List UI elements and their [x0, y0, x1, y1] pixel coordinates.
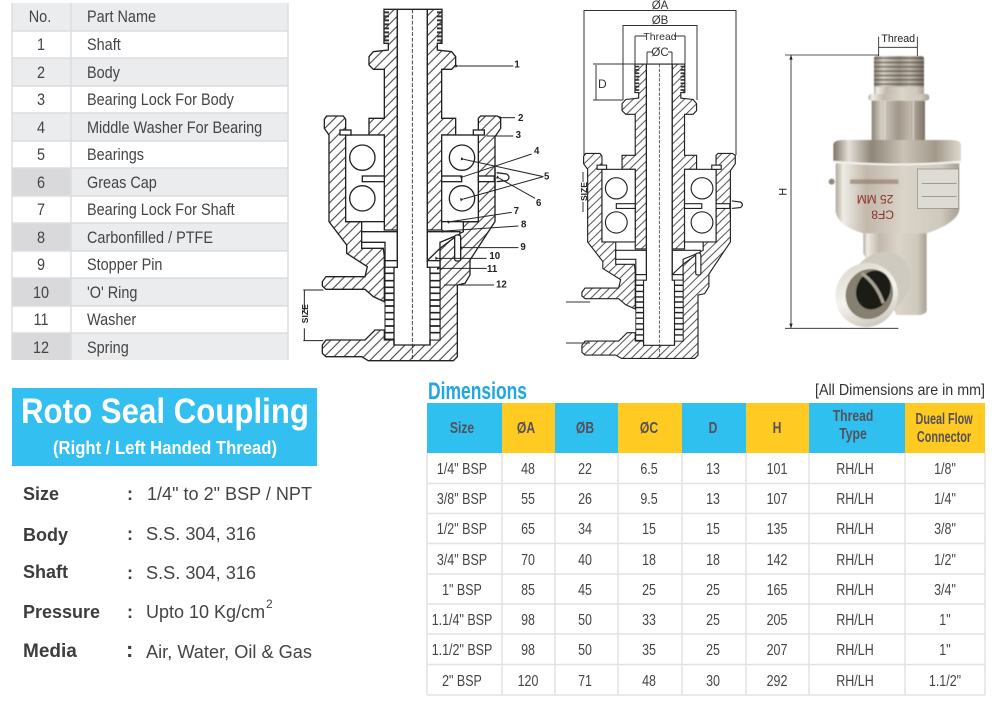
dimensions table: Size	[450, 419, 474, 438]
dimensions table: 25	[706, 642, 720, 659]
parts table: Shaft	[87, 36, 121, 54]
specifications list: Body	[23, 525, 68, 545]
dimensions table: 207	[767, 642, 787, 659]
dimensions table: 18	[706, 552, 720, 569]
dimensions table: 135	[767, 521, 787, 538]
dimensions table: 3/4"	[934, 582, 956, 599]
parts table: Bearing Lock For Body	[87, 91, 234, 109]
product photo of coupling: H	[777, 188, 789, 196]
dimensions table: 18	[642, 552, 656, 569]
dimensions table: 1/2" BSP	[437, 521, 487, 538]
dimensions table: 120	[518, 673, 538, 690]
parts table: Washer	[87, 311, 136, 329]
dimensions table: 35	[642, 642, 656, 659]
dimensions table: 1.1/2"	[929, 673, 961, 690]
dimensions table: RH/LH	[836, 521, 874, 538]
dimensions table: 1/4" BSP	[437, 461, 487, 478]
dimensioned cross-section diagram: ØA	[652, 0, 669, 12]
dimensions table: 6.5	[640, 461, 658, 478]
cross-section diagram with part numbers: 12	[496, 280, 507, 291]
dimensions table: H	[773, 419, 781, 438]
parts table: No.	[29, 8, 51, 26]
dimensions table: 1/4"	[934, 491, 956, 508]
dimensions table: RH/LH	[836, 491, 874, 508]
cross-section diagram with part numbers: 2	[518, 113, 523, 124]
cross-section diagram with part numbers: 9	[520, 242, 526, 253]
product photo of coupling: CF8	[871, 208, 894, 222]
cross-section diagram with part numbers: 10	[489, 251, 500, 262]
dimensions table: ØA	[517, 419, 535, 438]
dimensions table: 101	[767, 461, 787, 478]
parts table: Stopper Pin	[87, 256, 162, 274]
title banner	[12, 388, 317, 466]
dimensions table: 34	[578, 521, 592, 538]
cross-section diagram with part numbers: 11	[487, 264, 498, 275]
specifications list: Air, Water, Oil & Gas	[146, 642, 312, 662]
dimensions table: 13	[706, 491, 720, 508]
dimensions table: 30	[706, 673, 720, 690]
cross-section diagram with part numbers: 8	[521, 219, 527, 230]
dimensions table: 1"	[939, 612, 951, 629]
parts table: 1	[37, 36, 45, 54]
specifications list: :	[127, 524, 133, 544]
parts table: 11	[34, 311, 48, 329]
specifications list: Pressure	[23, 602, 100, 622]
product photo of coupling: Thread	[881, 33, 915, 45]
specifications list	[23, 484, 312, 662]
dimensions heading: [All Dimensions are in mm]	[815, 382, 985, 399]
specifications list: :	[127, 484, 133, 504]
title banner: (Right / Left Handed Thread)	[53, 438, 277, 458]
dimensions table: 1"	[939, 642, 951, 659]
dimensions table: 142	[767, 552, 787, 569]
dimensions table: 107	[767, 491, 787, 508]
dimensions table: 1.1/2" BSP	[432, 642, 492, 659]
specifications list: Media	[23, 641, 77, 662]
dimensions table: Connector	[917, 428, 971, 445]
dimensions table: RH/LH	[836, 582, 874, 599]
parts table: 'O' Ring	[87, 284, 137, 302]
cross-section diagram with part numbers: 5	[544, 171, 550, 182]
parts table: 8	[37, 229, 45, 247]
cross-section diagram with part numbers	[300, 9, 550, 361]
dimensions table: 25	[706, 582, 720, 599]
specifications list: S.S. 304, 316	[146, 524, 256, 544]
parts table: 7	[37, 201, 45, 219]
dimensioned cross-section diagram: ØC	[651, 47, 669, 59]
dimensions table: 292	[767, 673, 787, 690]
specifications list: 2	[266, 597, 273, 611]
dimensions table: 25	[642, 582, 656, 599]
parts table: Spring	[87, 339, 129, 357]
parts table: Carbonfilled / PTFE	[87, 229, 213, 247]
title banner: Roto Seal Coupling	[21, 392, 309, 431]
dimensions table: 98	[521, 642, 535, 659]
dimensions table: 65	[521, 521, 535, 538]
dimensions table: ØC	[640, 419, 658, 438]
dimensions table: 3/4" BSP	[437, 552, 487, 569]
parts table: 10	[33, 284, 49, 302]
dimensions table: 3/8"	[934, 521, 956, 538]
parts table: 12	[33, 339, 49, 357]
specifications list: :	[127, 602, 133, 622]
parts table: Greas Cap	[87, 174, 157, 192]
dimensions table: 2" BSP	[442, 673, 482, 690]
cross-section diagram with part numbers: 4	[534, 146, 540, 157]
dimensions table: 26	[578, 491, 592, 508]
specifications list: 1/4" to 2" BSP / NPT	[147, 484, 312, 504]
dimensions heading: Dimensions	[428, 378, 527, 405]
parts table: 2	[37, 64, 45, 82]
dimensions table: 22	[578, 461, 592, 478]
parts table: Part Name	[87, 8, 156, 26]
specifications list: S.S. 304, 316	[146, 563, 256, 583]
dimensions table: 205	[767, 612, 787, 629]
dimensions table: RH/LH	[836, 673, 874, 690]
dimensions table: 45	[578, 582, 592, 599]
dimensioned cross-section diagram	[566, 0, 742, 358]
dimensions table: 3/8" BSP	[437, 491, 487, 508]
parts table: Bearings	[87, 146, 144, 164]
dimensions table: 48	[521, 461, 535, 478]
cross-section diagram with part numbers: 6	[536, 198, 542, 209]
parts table: 4	[37, 119, 45, 137]
dimensions table: 55	[521, 491, 535, 508]
dimensions table: 1/2"	[934, 552, 956, 569]
cross-section diagram with part numbers: 3	[516, 130, 522, 141]
parts table	[12, 3, 288, 360]
dimensions table: 15	[706, 521, 720, 538]
product photo of coupling: 25 MM	[857, 192, 893, 206]
specifications list: Size	[23, 484, 59, 504]
dimensioned cross-section diagram: Thread	[643, 31, 677, 43]
specifications list: :	[126, 637, 133, 662]
dimensions table: 33	[642, 612, 656, 629]
dimensions table: D	[709, 419, 717, 438]
dimensions table: ØB	[576, 419, 594, 438]
dimensions table: Type	[839, 425, 867, 444]
parts table: 9	[37, 256, 45, 274]
dimensions table: 70	[521, 552, 535, 569]
dimensions table: RH/LH	[836, 552, 874, 569]
parts table: 6	[37, 174, 45, 192]
specifications list: :	[127, 563, 133, 583]
dimensions table: RH/LH	[836, 461, 874, 478]
parts table: Body	[87, 64, 120, 82]
dimensioned cross-section diagram: SIZE	[579, 182, 589, 201]
product photo of coupling	[777, 33, 961, 337]
dimensions table	[427, 403, 985, 695]
dimensions table: 1.1/4" BSP	[432, 612, 492, 629]
dimensions table: 71	[578, 673, 592, 690]
dimensions table: 48	[642, 673, 656, 690]
dimensioned cross-section diagram: D	[598, 77, 607, 91]
cross-section diagram with part numbers: 7	[514, 206, 519, 217]
cross-section diagram with part numbers: 1	[514, 60, 520, 71]
parts table: 3	[37, 91, 45, 109]
dimensions table: 1" BSP	[442, 582, 482, 599]
parts table: Bearing Lock For Shaft	[87, 201, 235, 219]
dimensions table: 25	[706, 612, 720, 629]
dimensions table: 1/8"	[934, 461, 956, 478]
dimensions table: 40	[578, 552, 592, 569]
dimensions table: Thread	[833, 407, 873, 426]
cross-section diagram with part numbers: SIZE	[300, 304, 310, 323]
parts table: Middle Washer For Bearing	[87, 119, 262, 137]
dimensioned cross-section diagram: ØB	[652, 15, 669, 27]
dimensions table: RH/LH	[836, 612, 874, 629]
specifications list: Upto 10 Kg/cm	[146, 602, 265, 622]
dimensions table: 98	[521, 612, 535, 629]
dimensions heading	[428, 378, 985, 405]
dimensions table: RH/LH	[836, 642, 874, 659]
specifications list: Shaft	[23, 562, 68, 582]
dimensions table: 15	[642, 521, 656, 538]
dimensions table: 85	[521, 582, 535, 599]
dimensions table: 9.5	[640, 491, 658, 508]
dimensions table: 50	[578, 642, 592, 659]
parts table: 5	[37, 146, 45, 164]
dimensions table: 13	[706, 461, 720, 478]
dimensions table: 50	[578, 612, 592, 629]
dimensions table: Dueal Flow	[916, 410, 973, 427]
dimensions table: 165	[767, 582, 787, 599]
